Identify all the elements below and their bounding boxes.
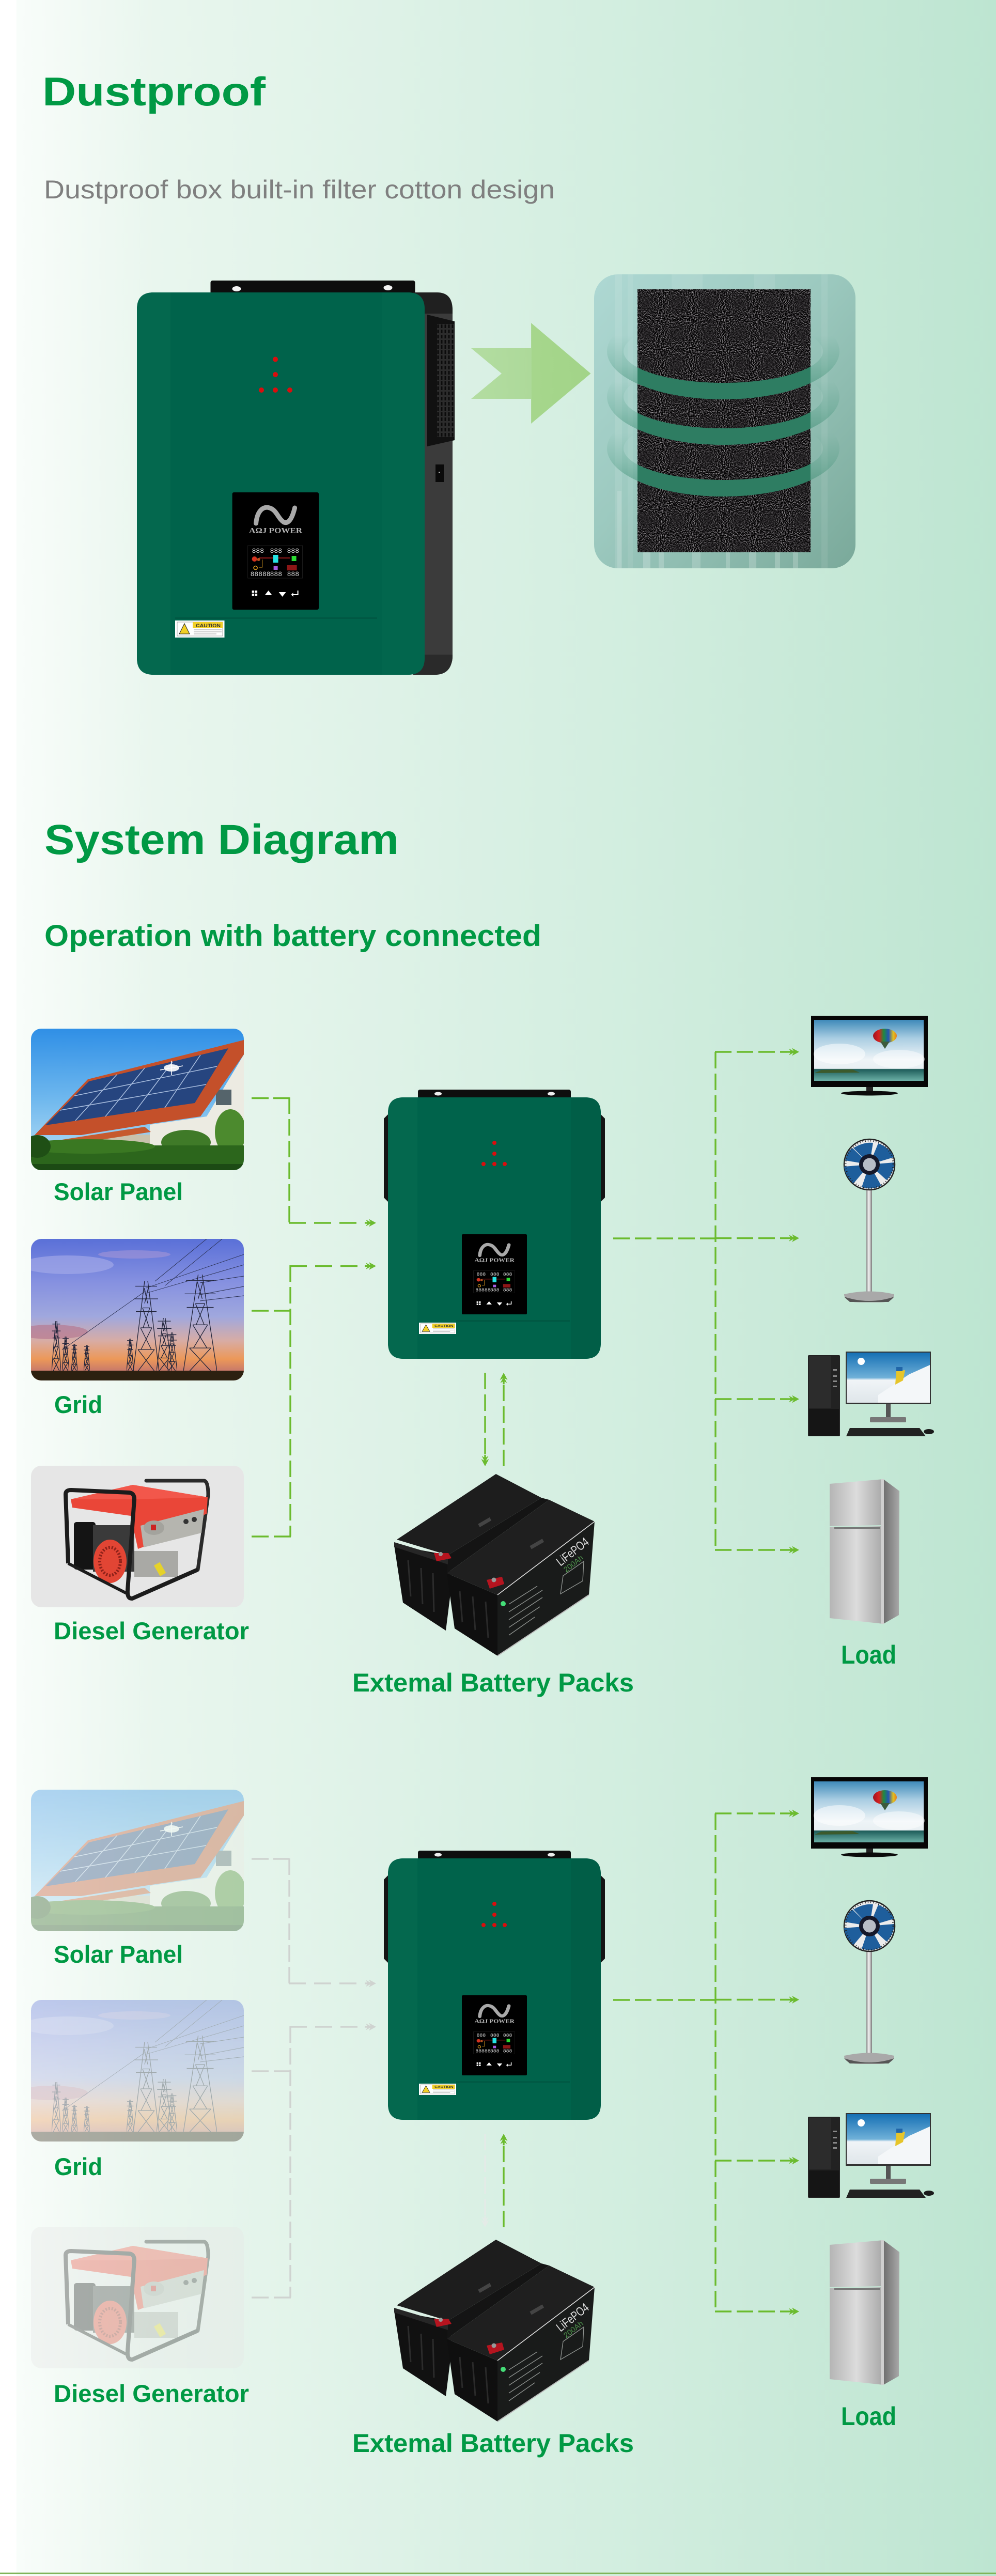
image: battery packs (394, 1474, 595, 1656)
icon: standing fan (844, 1139, 895, 1302)
arrows: input wiring, inactive sources (252, 1858, 376, 2298)
icon: desktop computer, second diagram (808, 2113, 934, 2198)
label: Grid: Grid (54, 1391, 102, 1418)
image: diesel generator, inactive (31, 2227, 244, 2368)
display panel, second diagram: 888 (490, 2049, 500, 2054)
image: battery packs: LiFePO4 (554, 1535, 592, 1569)
display panel: large inverter: 888 (287, 547, 299, 555)
caution label: large inverter: CAUTION (196, 623, 221, 629)
caution label: CAUTION (434, 1325, 453, 1328)
label: Solar Panel, second diagram: Solar Panel (54, 1941, 183, 1968)
icon: refrigerator (830, 1479, 899, 1624)
display panel, second diagram: AΩJ POWER (474, 2019, 515, 2025)
image: battery packs, second diagram: LiFePO4 (554, 2301, 592, 2335)
image: solar panel house (21, 1029, 246, 1170)
display panel, second diagram: 888 (490, 2032, 500, 2038)
heading: Dustproof: Dustproof (42, 69, 266, 114)
display panel (462, 1234, 527, 1314)
subheading: Operation with battery connected: Operation with battery connected (44, 919, 541, 953)
panel: filter cotton close-up (594, 274, 855, 568)
display panel: large inverter: AΩJ POWER (249, 527, 302, 535)
inverter: side view with dust box (137, 281, 455, 675)
display panel: 888 (490, 1287, 500, 1293)
icon: standing fan, second diagram (844, 1901, 895, 2064)
display panel: AΩJ POWER (474, 1258, 515, 1264)
display panel: large inverter: 888 (270, 547, 282, 555)
display panel, second diagram (462, 1995, 527, 2075)
caution label, second diagram: CAUTION (434, 2086, 453, 2089)
label: Extemal Battery Packs: Extemal Battery Packs (352, 1668, 634, 1697)
ring: airflow band 1 (607, 303, 839, 399)
display panel: 888 (477, 1271, 486, 1277)
image: grid pylons, inactive (15, 2000, 244, 2142)
display panel: large inverter: 88888 (251, 570, 271, 578)
label: Load: Load (841, 1640, 896, 1669)
image: solar panel house, inactive (21, 1790, 246, 1931)
display panel, second diagram: 888 (503, 2032, 512, 2038)
arrows: input wiring, active sources (252, 1097, 376, 1537)
display panel: large inverter: 888 (287, 570, 299, 578)
display panel: large inverter: 888 (270, 570, 282, 578)
display panel: 888 (503, 1287, 512, 1293)
arrow: to filter cotton (471, 323, 591, 424)
text block: dustproof description: Dustproof box built-in filter cotton design (44, 175, 555, 204)
image: battery packs, second diagram (394, 2240, 595, 2422)
icon: television (811, 1016, 928, 1095)
caution label: large inverter (175, 620, 224, 638)
arrows: output wiring to loads (613, 1048, 799, 1554)
icon: desktop computer (808, 1352, 934, 1436)
display panel, second diagram: 888 (477, 2032, 486, 2038)
heading: System Diagram: System Diagram (44, 816, 399, 863)
display panel, second diagram: 88888 (475, 2049, 491, 2054)
inverter: front view, battery discharging (384, 1851, 605, 2120)
display panel: large inverter (232, 492, 319, 610)
label: Load, second diagram: Load (841, 2402, 896, 2431)
image: diesel generator (31, 1466, 244, 1607)
image: grid pylons (15, 1239, 244, 1381)
icon: television, second diagram (811, 1777, 928, 1857)
display panel: 888 (490, 1271, 500, 1277)
ring: airflow band 2 (607, 349, 839, 445)
label: Extemal Battery Packs, second diagram: Extemal Battery Packs (352, 2429, 634, 2458)
label: Grid, second diagram: Grid (54, 2153, 102, 2180)
display panel, second diagram: 888 (503, 2049, 512, 2054)
caution label, second diagram (419, 2084, 456, 2095)
label: Solar Panel: Solar Panel (54, 1178, 183, 1205)
icon: refrigerator, second diagram (830, 2240, 899, 2385)
label: Diesel Generator, second diagram: Diesel Generator (54, 2380, 249, 2407)
image: battery packs, second diagram: 200Ah (562, 2319, 585, 2340)
inverter: front view, battery connected (384, 1090, 605, 1359)
arrows: inverter to and from battery (481, 1373, 507, 1466)
display panel: 88888 (475, 1287, 491, 1293)
arrows: output wiring to loads, second diagram (613, 1809, 799, 2316)
arrows: battery to inverter (481, 2134, 507, 2227)
caution label (419, 1323, 456, 1334)
ring: airflow band 3 (607, 400, 839, 496)
display panel: large inverter: 888 (252, 547, 264, 555)
display panel: 888 (503, 1271, 512, 1277)
label: Diesel Generator: Diesel Generator (54, 1617, 249, 1644)
image: battery packs: 200Ah (562, 1554, 585, 1574)
